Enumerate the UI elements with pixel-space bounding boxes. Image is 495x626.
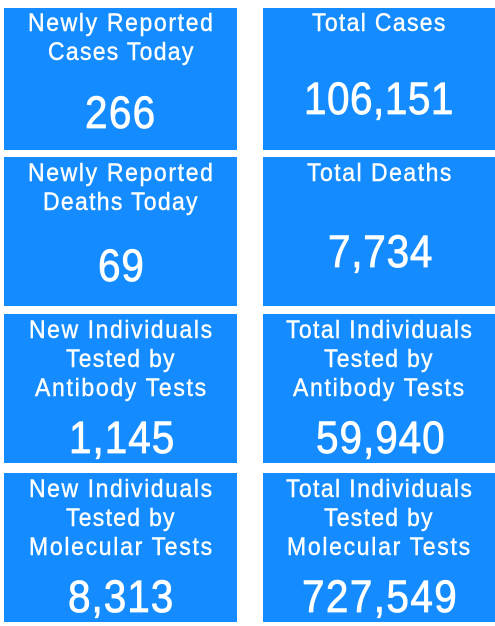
panel: total individuals antibody xyxy=(263,314,495,464)
panel: total cases xyxy=(263,8,495,150)
panel: new individuals molecular xyxy=(4,473,237,623)
panel: newly reported deaths today: Newly Reported xyxy=(28,159,213,187)
panel: total cases: Total Cases xyxy=(312,9,445,37)
panel: newly reported deaths today: Deaths Today xyxy=(43,188,198,216)
panel: new individuals molecular: 8,313 xyxy=(68,572,173,623)
panel: new individuals molecular: Tested by xyxy=(66,504,175,532)
panel: new individuals antibody: New Individuals xyxy=(29,316,212,344)
panel: newly reported cases today: Newly Reported xyxy=(28,9,213,37)
panel: newly reported deaths today: 69 xyxy=(98,241,144,292)
panel: total individuals molecular: 727,549 xyxy=(302,572,457,623)
panel: new individuals antibody xyxy=(4,314,237,464)
panel: total individuals antibody: Total Individuals xyxy=(286,316,472,344)
panel: new individuals molecular: New Individuals xyxy=(29,475,212,503)
panel: newly reported cases today xyxy=(4,8,237,150)
panel: total cases: 106,151 xyxy=(304,74,453,125)
panel: total individuals antibody: Tested by xyxy=(324,345,433,373)
panel: total individuals molecular: Tested by xyxy=(324,504,433,532)
panel: total deaths: 7,734 xyxy=(328,227,432,278)
panel: total deaths: Total Deaths xyxy=(307,159,451,187)
panel: new individuals antibody: Antibody Tests xyxy=(35,374,206,402)
panel: newly reported cases today: 266 xyxy=(85,88,155,139)
panel: new individuals antibody: Tested by xyxy=(66,345,175,373)
panel: newly reported deaths today xyxy=(4,157,237,306)
panel: new individuals molecular: Molecular Tests xyxy=(29,533,212,561)
panel: total deaths xyxy=(263,157,495,306)
panel: total individuals molecular: Total Individuals xyxy=(286,475,472,503)
panel: new individuals antibody: 1,145 xyxy=(69,413,174,464)
panel: newly reported cases today: Cases Today xyxy=(48,38,193,66)
panel: total individuals molecular xyxy=(263,473,495,623)
panel: total individuals molecular: Molecular Tests xyxy=(287,533,470,561)
panel: total individuals antibody: 59,940 xyxy=(316,413,445,464)
panel: total individuals antibody: Antibody Tests xyxy=(293,374,464,402)
